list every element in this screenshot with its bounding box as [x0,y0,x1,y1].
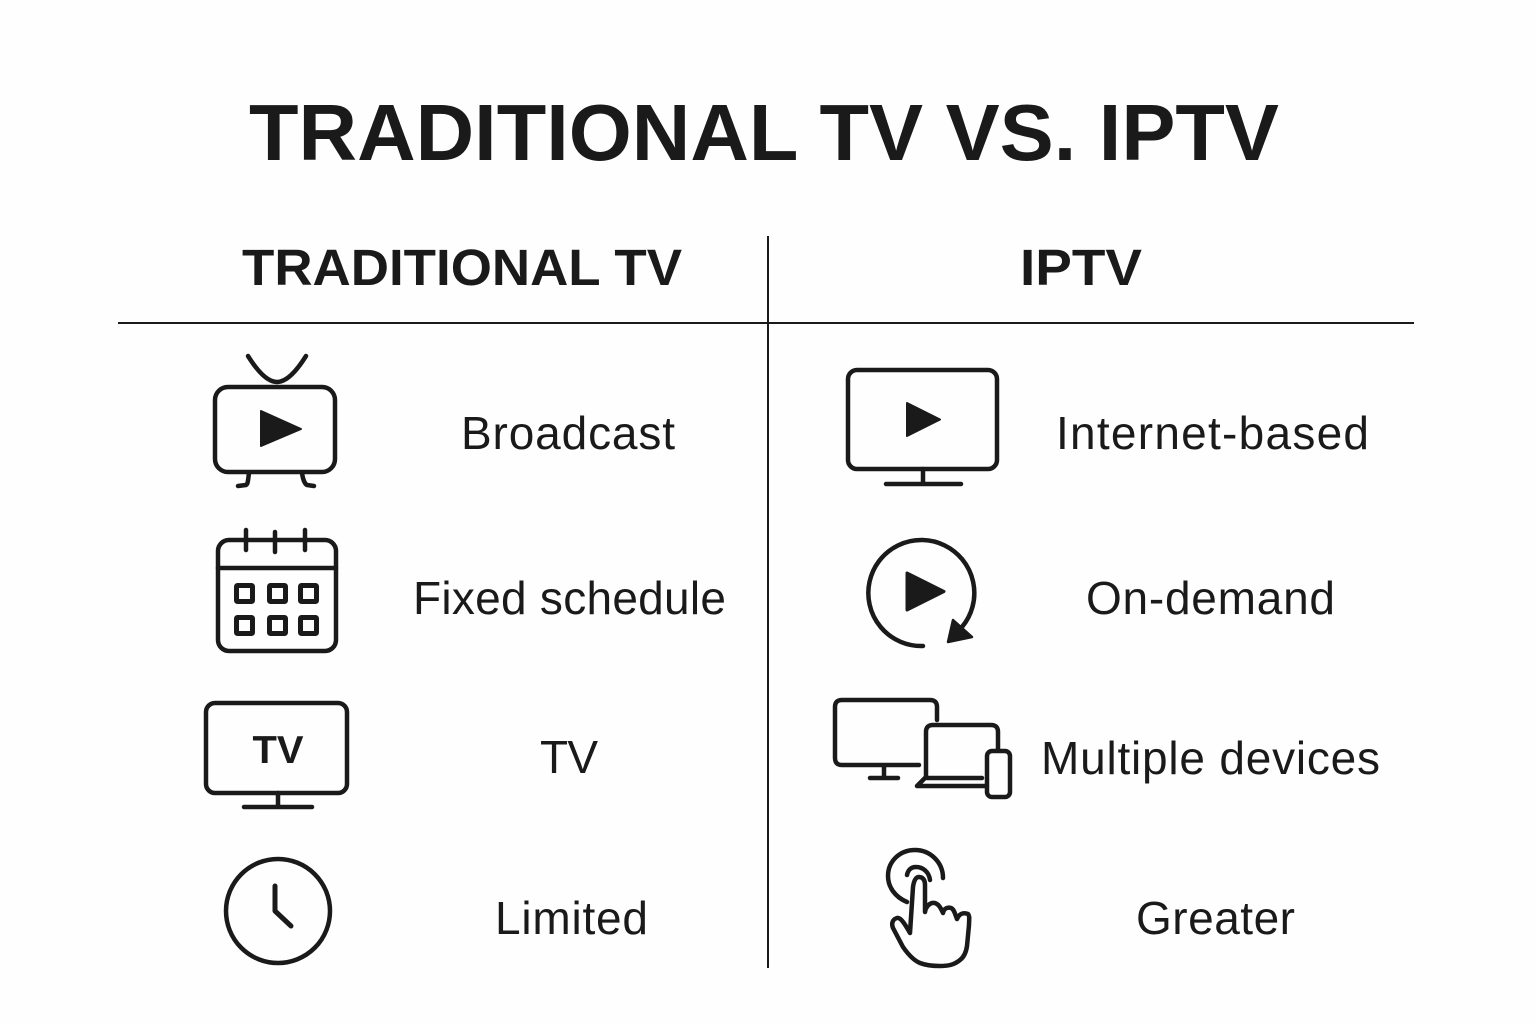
label: multiple devices: Multiple devices [1041,732,1380,784]
icon: retro tv with antenna [215,356,335,486]
icon: tv monitor [206,703,347,807]
label: broadcast: Broadcast [461,407,675,459]
label: limited: Limited [495,892,648,944]
icon text: tv: TV [252,729,304,772]
heading: traditional tv: TRADITIONAL TV [242,239,682,296]
label: internet-based: Internet-based [1056,407,1369,459]
icon: tap hand [888,850,969,966]
icon: multiple devices [835,700,1010,797]
heading: iptv: IPTV [1020,239,1142,296]
icon: replay [868,540,974,646]
icon: calendar [218,530,336,651]
label: fixed schedule: Fixed schedule [413,572,726,624]
label: tv: TV [540,731,598,783]
icon: clock [226,859,330,963]
title: TRADITIONAL TV VS. IPTV [249,88,1279,177]
label: greater: Greater [1136,892,1295,944]
label: on-demand: On-demand [1086,572,1335,624]
icon: monitor with play [848,370,997,484]
